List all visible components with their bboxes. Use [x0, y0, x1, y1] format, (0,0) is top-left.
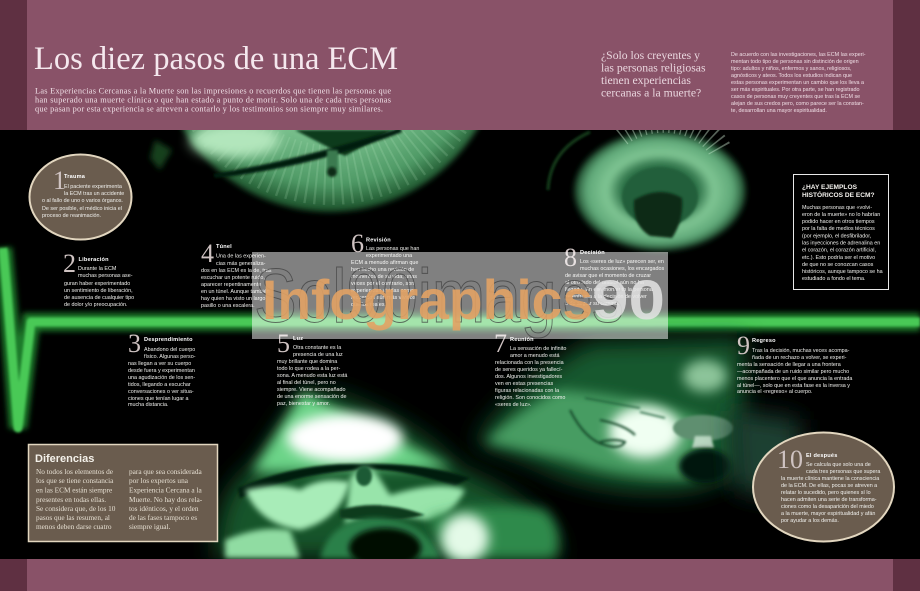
step 7: Reunión: La sensación de infinito [510, 346, 566, 352]
sidebar question heading: ¿Solo los creyentes y [601, 49, 700, 62]
step 8: Decisión: Los «seres de luz» parecen ser, en [580, 259, 664, 265]
watermark: 90 [592, 268, 665, 331]
panel: historical examples: etc.). Esto podría ser el motivo [802, 255, 875, 261]
step 10: El después: la muerte clínica mantiene la consciencia [781, 476, 879, 482]
step 9: Regreso: menta la sensación de llegar a una frontera [737, 362, 841, 368]
panel: Diferencias: tos idénticos, y el orden [129, 504, 199, 513]
bottom band [0, 559, 920, 591]
face of the patient [215, 392, 560, 568]
step 4: Túnel: Una de las experien- [216, 254, 266, 260]
panel: historical examples: de que no se conozcan casos [802, 262, 874, 268]
step 8: Decisión: llegado. En ese momento la persona [565, 287, 653, 293]
step 4: Túnel [201, 239, 273, 309]
step 5: Luz: paz, bienestar y amor. [277, 401, 330, 407]
step 10: El después: a la muerte, mayor espiritualidad y afán [781, 511, 875, 517]
step 7: Reunión: amor a menudo está [510, 353, 559, 359]
step 1: Trauma: El paciente experimenta [64, 184, 122, 190]
step 3: Desprendimiento: desde fuera y experimentan [128, 368, 195, 374]
step 2: Liberación: de ausencia de cualquier tipo [64, 295, 134, 301]
step 1: Trauma: o al fallo de uno o varios órganos. [42, 198, 123, 204]
step 7: Reunión: dos. Algunos investigadores [495, 374, 562, 380]
sidebar answer text: alejan de sus credos pero, como parece ser la constan- [731, 101, 864, 107]
step 8: Decisión: de avisar que el momento de cruzar [565, 273, 651, 279]
panel: historical examples: ¿HAY EJEMPLOS [802, 184, 858, 191]
step 6: Revisión: han hecho una revisión de [351, 267, 414, 273]
intro text: han superado una muerte clínica o que han estado a punto de morir. Solo una de cada tres personas [35, 96, 391, 104]
step 4: Túnel: hay quien ha visto un largo [201, 296, 265, 302]
step 1: Trauma: Trauma [64, 174, 86, 180]
step 6: Revisión: Revisión [366, 238, 391, 244]
step 3: Desprendimiento: nas llegan a ver su cuerpo [128, 361, 191, 367]
step 3: Desprendimiento: conversaciones o ver situa- [128, 389, 194, 395]
step 2: Liberación: muchas personas ase- [78, 273, 133, 279]
step 5: Luz: muy brillante que domina [277, 359, 337, 365]
step 7: Reunión: relacionada con la presencia [495, 360, 564, 366]
panel: historical examples: históricos, aunque tampoco se ha [802, 269, 883, 275]
step 10: El después: relatar lo sucedido, pero quienes sí lo [781, 490, 871, 496]
step 4: Túnel: dos en las ECM es la de, tras [201, 268, 272, 274]
step 3: Desprendimiento: 3 [128, 329, 141, 358]
step 9: Regreso [737, 331, 854, 395]
step 2: Liberación [63, 249, 136, 308]
panel: Diferencias: No todos los elementos de [36, 467, 113, 476]
step 5: Luz: al final del túnel, pero no [277, 380, 336, 386]
surgical lamp, top right [548, 121, 746, 251]
step 9: Regreso: ñada de un rechazo a volver, se experi- [752, 355, 847, 361]
panel: Diferencias: los que se tiene constancia [36, 476, 114, 485]
step 9: Regreso: —acompañada de un ruido similar pero mucho [737, 369, 849, 375]
step 6: Revisión: recuerdos aún más vívidos [351, 295, 416, 301]
step 8: Decisión: o de seguir su camino. [565, 301, 619, 307]
sidebar answer text: tipo: adultos y niños, enfermos y sanos, religiosos, [731, 66, 852, 72]
panel: historical examples: podido hacer en otros tiempos [802, 219, 875, 225]
step 4: Túnel: en un túnel. Aunque también [201, 289, 270, 295]
step 5: Luz: Otra constante es la [293, 345, 341, 351]
step 1: Trauma: la ECM tras un accidente [64, 191, 124, 197]
step 4: Túnel: escuchar un potente ruido, [201, 275, 265, 281]
step 6: Revisión: veces por el contrario, son [351, 281, 414, 287]
sidebar question heading: cercanas a la muerte? [601, 86, 701, 100]
step 8: Decisión [564, 243, 666, 307]
step 4: Túnel: cias más generaliza- [216, 261, 266, 267]
step 7: Reunión: Reunión [510, 337, 534, 343]
panel: Diferencias: para que sea considerada [129, 467, 202, 476]
step 6: Revisión: experiencias vividas como [351, 288, 414, 294]
step 7: Reunión [494, 329, 568, 408]
sidebar question heading [601, 49, 706, 100]
step 4: Túnel: pasillo o una escalera. [201, 303, 255, 309]
step 8: Decisión: Decisión [580, 250, 605, 256]
panel: historical examples [794, 174, 888, 290]
panel: historical examples: eron de la muerte» no lo habrían [802, 212, 880, 218]
step 10: El después: 10 [777, 445, 803, 474]
step 5: Luz: de una enorme sensación de [277, 394, 347, 400]
panel: historical examples: por la falta de medios técnicos [802, 226, 875, 232]
step 2: Liberación: 2 [63, 249, 76, 278]
photo: operating room in green night-vision tones [0, 130, 920, 559]
step 6: Revisión [351, 229, 421, 308]
step 6: Revisión: Las personas que han [366, 246, 419, 252]
step 10: El después: cada tres personas que supera [806, 469, 880, 475]
step 2: Liberación: Liberación [78, 257, 109, 263]
step 3: Desprendimiento: Abandono del cuerpo [144, 347, 195, 353]
step 6: Revisión: ECM a menudo afirman que [351, 260, 418, 266]
step 2: Liberación: un sentimiento de liberación, [64, 288, 133, 294]
panel: historical examples: el corazón, el corazón artificial, [802, 248, 877, 254]
step 1: Trauma: proceso de reanimación. [42, 213, 101, 219]
panel: Diferencias: Diferencias [35, 453, 94, 465]
panel: Diferencias: presentes en todas ellas. [36, 495, 106, 504]
sidebar answer text: mentan todo tipo de personas sin distinción de origen [731, 59, 859, 65]
step 10: El después: Se calcula que solo una de [806, 462, 871, 468]
step 3: Desprendimiento: mucha distancia. [128, 402, 168, 408]
panel: historical examples: (por ejemplo, el desfibrilador, [802, 234, 872, 240]
step 10: El después: de la ECM. De ellas, pocas se atreven a [781, 483, 877, 489]
step 8: Decisión: se enfrenta a la decisión de volver [565, 294, 647, 300]
intro text: Las Experiencias Cercanas a la Muerte son las impresiones o recuerdos que tienen las personas que [35, 86, 391, 96]
title: Los diez pasos de una ECM [34, 41, 398, 77]
panel: Diferencias: de las fases tampoco es [129, 513, 197, 522]
step 10: El después: por ayudar a los demás. [781, 518, 839, 524]
panel: historical examples: HISTÓRICOS DE ECM? [802, 190, 875, 199]
step 7: Reunión: figuras relacionadas con la [495, 388, 559, 394]
step 3: Desprendimiento: una agudización de los sen- [128, 375, 195, 381]
sidebar answer text: De acuerdo con las investigaciones, las ECM las experi- [731, 52, 866, 58]
step 9: Regreso: 9 [737, 331, 750, 360]
step 5: Luz: todo lo que rodea a la per- [277, 366, 340, 372]
step 9: Regreso: anuncia el «regreso» al cuerpo. [737, 389, 813, 395]
step 4: Túnel: aparecer repentinamente [201, 282, 261, 288]
step 6: Revisión: momentos de su vida; unas [351, 274, 417, 280]
step 5: Luz: presencia de una luz [293, 352, 343, 358]
step 1: Trauma: 1 [53, 166, 66, 195]
step 5: Luz: sona. A menudo esta luz está [277, 373, 347, 379]
sidebar answer text: agnósticos y ateos. Todos los estudios indican que [731, 73, 852, 79]
watermark: Infographics [262, 268, 593, 331]
step 5: Luz: 5 [277, 329, 290, 358]
top header band [0, 0, 920, 130]
sidebar answer text: estas personas experimentan un cambio que los lleva a [731, 80, 864, 86]
step 3: Desprendimiento: tidos, llegando a escuchar [128, 382, 191, 388]
panel: Diferencias: Se considera que, de los 10 [36, 504, 116, 513]
step 10: El después: hacen admiten una serie de transforma- [781, 497, 877, 503]
step 9: Regreso: Regreso [752, 338, 776, 344]
panel: Diferencias: menos deben darse cuatro [36, 522, 112, 531]
panel: historical examples: las inyecciones de adrenalina en [802, 240, 880, 246]
panel: Diferencias: Experiencia Cercana a la [129, 486, 202, 494]
step 2: Liberación: Durante la ECM [78, 266, 117, 272]
panel: historical examples: Muchas personas que «volvi- [802, 205, 872, 211]
sidebar question heading: tienen experiencias [601, 74, 691, 87]
surgical lamp, top centre [148, 130, 481, 216]
watermark: Sol90images [254, 254, 624, 339]
sidebar answer text: te, desarrollan una mayor espiritualidad. [731, 108, 827, 114]
sidebar answer text: casos de personas muy creyentes que tras la ECM se [731, 94, 860, 100]
step 5: Luz: siempre. Viene acompañado [277, 387, 346, 393]
step 8: Decisión: 8 [564, 243, 577, 272]
step 3: Desprendimiento: Desprendimiento [144, 337, 193, 343]
sidebar answer text: ser más espirituales. Por otra parte, se han registrado [731, 87, 860, 93]
panel: historical examples: estudiado a fondo el tema. [802, 276, 866, 282]
panel: Diferencias: pasos que las resumen, al [36, 513, 110, 522]
step 5: Luz: Luz [293, 336, 303, 342]
step 7: Reunión: «seres de luz». [495, 402, 532, 408]
step 7: Reunión: de seres queridos ya fallecí- [495, 367, 563, 373]
step 9: Regreso: al túnel—, solo que en esta fase es la inversa y [737, 383, 850, 389]
step 6: Revisión: que los reales. [351, 302, 386, 308]
step 4: Túnel: 4 [201, 239, 214, 268]
intro text [35, 86, 391, 114]
step 2: Liberación: de dolor y/o preocupación. [64, 302, 128, 308]
ECG heartbeat line [3, 248, 920, 428]
step 9: Regreso: menos placentero que el que anuncia la entrada [737, 376, 852, 382]
step 2: Liberación: guran haber experimentado [64, 281, 130, 287]
step 9: Regreso: Tras la decisión, muchas veces acompa- [752, 348, 850, 354]
step 5: Luz [277, 329, 349, 407]
step 3: Desprendimiento: ciones que tenían lugar a [128, 396, 189, 402]
step 10: El después [753, 432, 894, 542]
panel: Diferencias [28, 444, 218, 542]
intro text: que pasan por esta experiencia se atreven a contarlo y los testimonios son siempre muy similares. [35, 104, 383, 114]
sidebar question heading: las personas religiosas [601, 62, 706, 74]
panel: Diferencias: siempre igual. [129, 522, 171, 531]
step 7: Reunión: ven en estas presencias [495, 381, 553, 387]
panel: Diferencias: en las ECM están siempre [36, 486, 112, 494]
cloth with surgical instruments [475, 338, 800, 500]
step 1: Trauma [30, 154, 132, 240]
step 8: Decisión: al otro lado del umbral aún no ha [565, 280, 644, 286]
step 1: Trauma: De ser posible, el médico inicia el [42, 206, 122, 212]
panel: Diferencias: Muerte. No hay dos rela- [129, 495, 203, 504]
step 8: Decisión: muchas ocasiones, los encargados [580, 266, 665, 272]
panel: Diferencias: por los expertos una [129, 476, 189, 485]
step 4: Túnel: Túnel [216, 244, 232, 250]
step 7: Reunión: religión. Son conocidos como [495, 395, 565, 401]
step 3: Desprendimiento: físico. Algunas perso- [144, 354, 196, 360]
step 7: Reunión: 7 [494, 329, 507, 358]
step 6: Revisión: experimentado una [366, 253, 412, 259]
step 10: El después: ciones como la desaparición del miedo [781, 504, 874, 510]
step 10: El después: El después [806, 453, 838, 459]
step 3: Desprendimiento [128, 329, 197, 408]
step 6: Revisión: 6 [351, 229, 364, 258]
